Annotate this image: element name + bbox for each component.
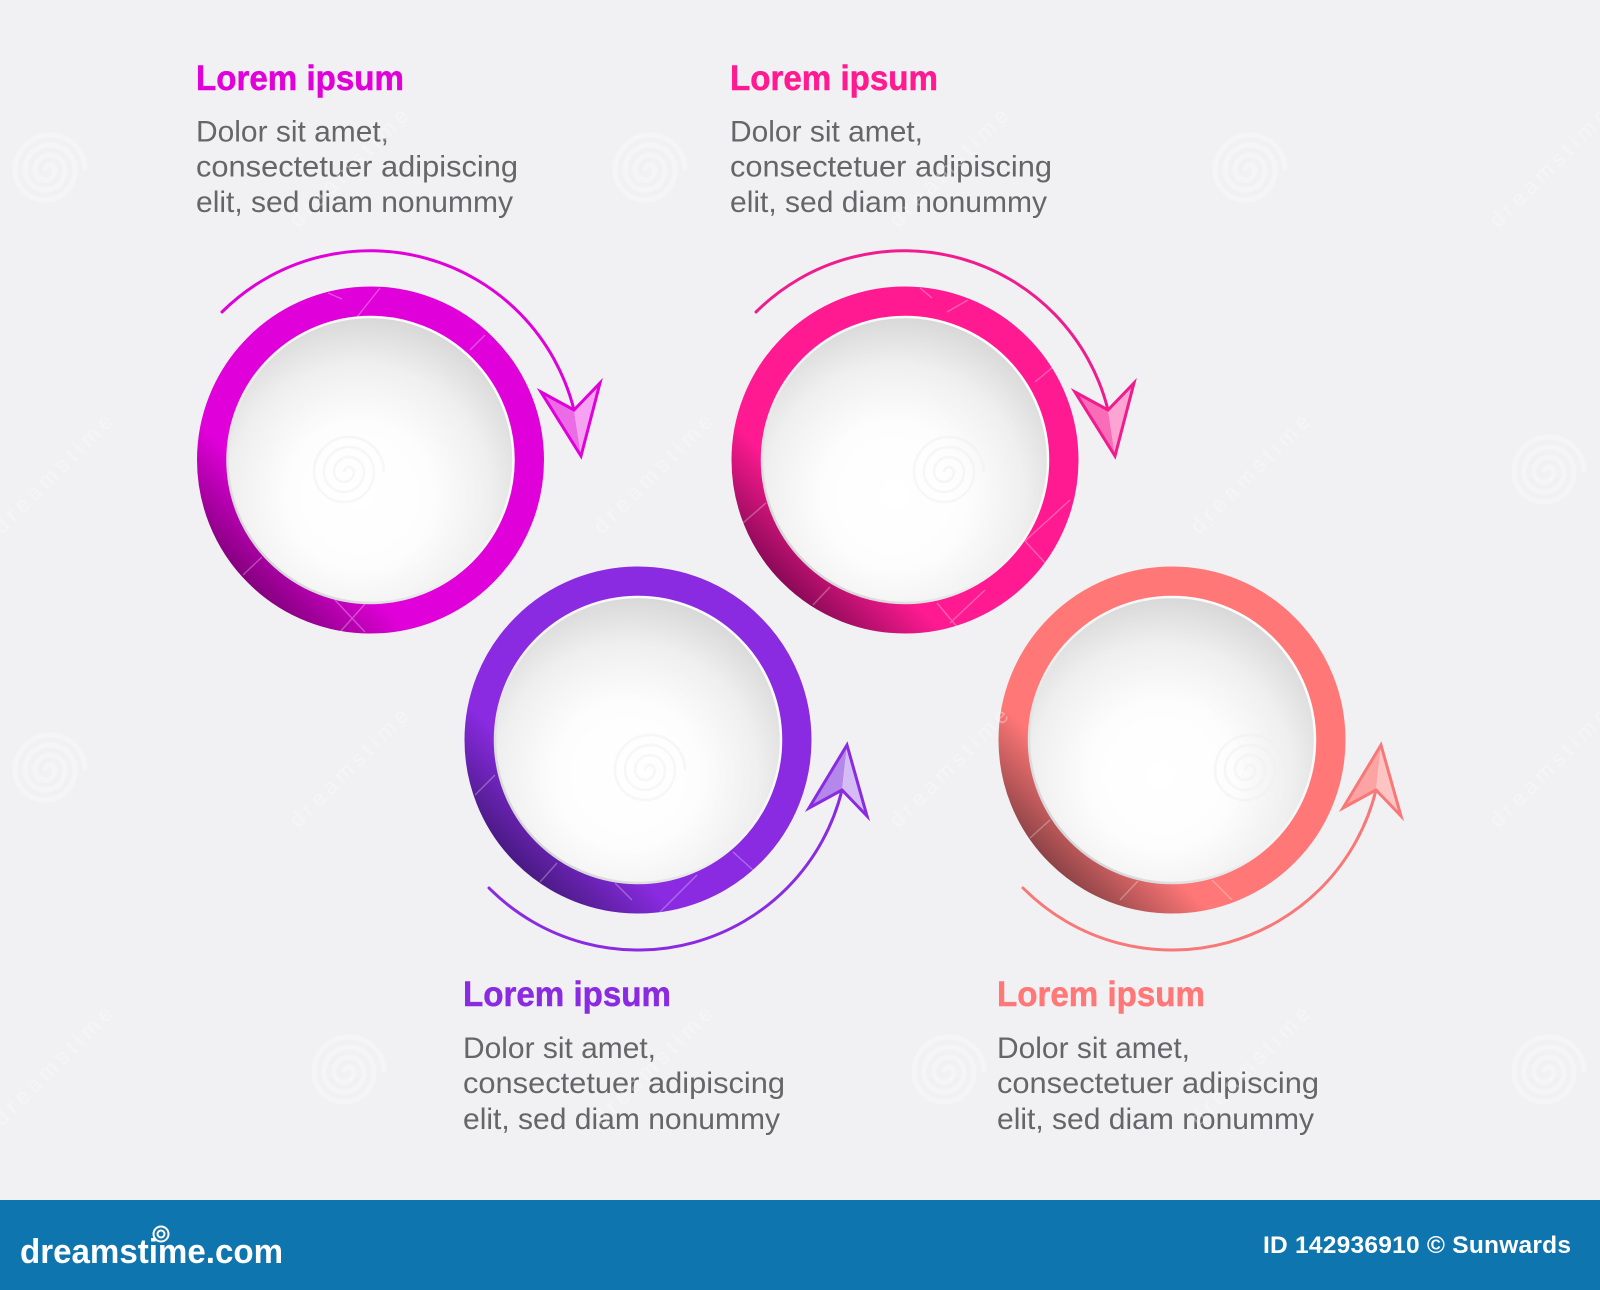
watermark text: dreamstime <box>884 103 1013 232</box>
text block: step 4: consectetuer adipiscing <box>997 1067 1319 1100</box>
text block: step 2: Dolor sit amet, <box>730 116 923 148</box>
icon: logo spiral <box>154 1226 168 1242</box>
text block: step 2 <box>730 116 1052 219</box>
arrow: step 4 <box>1023 745 1401 950</box>
ring: step 2 <box>746 302 1064 618</box>
footer credit: ID 142936910 © Sunwards <box>1263 1232 1571 1259</box>
text block: step 2: elit, sed diam nonummy <box>730 186 1047 219</box>
arrow: step 3 <box>489 745 867 950</box>
arrow: step 2 <box>756 251 1134 456</box>
watermark text: dreamstime <box>1185 1001 1314 1130</box>
text block: step 1: elit, sed diam nonummy <box>196 186 513 219</box>
text block: step 4 <box>997 1032 1319 1136</box>
watermark text: dreamstime <box>588 409 717 538</box>
footer bar <box>0 1200 1600 1290</box>
text block: step 3: elit, sed diam nonummy <box>463 1103 780 1136</box>
panel: step 2 pink <box>730 59 1134 618</box>
text block: step 1 <box>196 116 518 219</box>
heading: step 2: Lorem ipsum <box>730 59 938 98</box>
heading: step 4: Lorem ipsum <box>997 975 1205 1014</box>
watermark text: dreamstime <box>284 703 413 832</box>
heading: step 3: Lorem ipsum <box>463 975 671 1014</box>
disc: step 3 <box>495 597 781 883</box>
ring: step 3 <box>480 582 796 898</box>
text block: step 4: Dolor sit amet, <box>997 1032 1190 1065</box>
watermark text: dreamstime <box>1185 409 1314 538</box>
text block: step 1: consectetuer adipiscing <box>196 150 518 184</box>
ring: step 1 <box>212 302 529 618</box>
disc: step 1 <box>228 317 514 603</box>
text block: step 3 <box>463 1032 785 1136</box>
footer logo text: dreamstime.com <box>20 1233 283 1271</box>
heading: step 1: Lorem ipsum <box>196 59 404 98</box>
panel: step 1 magenta <box>196 59 600 618</box>
text block: step 3: consectetuer adipiscing <box>463 1067 785 1100</box>
text block: step 1: Dolor sit amet, <box>196 116 389 148</box>
disc: step 2 <box>762 317 1048 603</box>
watermark text: dreamstime <box>884 703 1013 832</box>
watermark spirals <box>15 135 1584 1102</box>
disc: step 4 <box>1029 597 1315 883</box>
watermark text: dreamstime <box>284 103 413 232</box>
panel: step 3 purple <box>463 582 867 1136</box>
panel: step 4 coral <box>997 582 1401 1136</box>
text block: step 2: consectetuer adipiscing <box>730 150 1052 184</box>
watermark text: dreamstime <box>588 1001 717 1130</box>
ring: step 4 <box>1014 582 1330 898</box>
text block: step 4: elit, sed diam nonummy <box>997 1103 1314 1136</box>
watermark text <box>0 103 1600 1130</box>
text block: step 3: Dolor sit amet, <box>463 1032 656 1065</box>
arrow: step 1 <box>222 251 600 456</box>
